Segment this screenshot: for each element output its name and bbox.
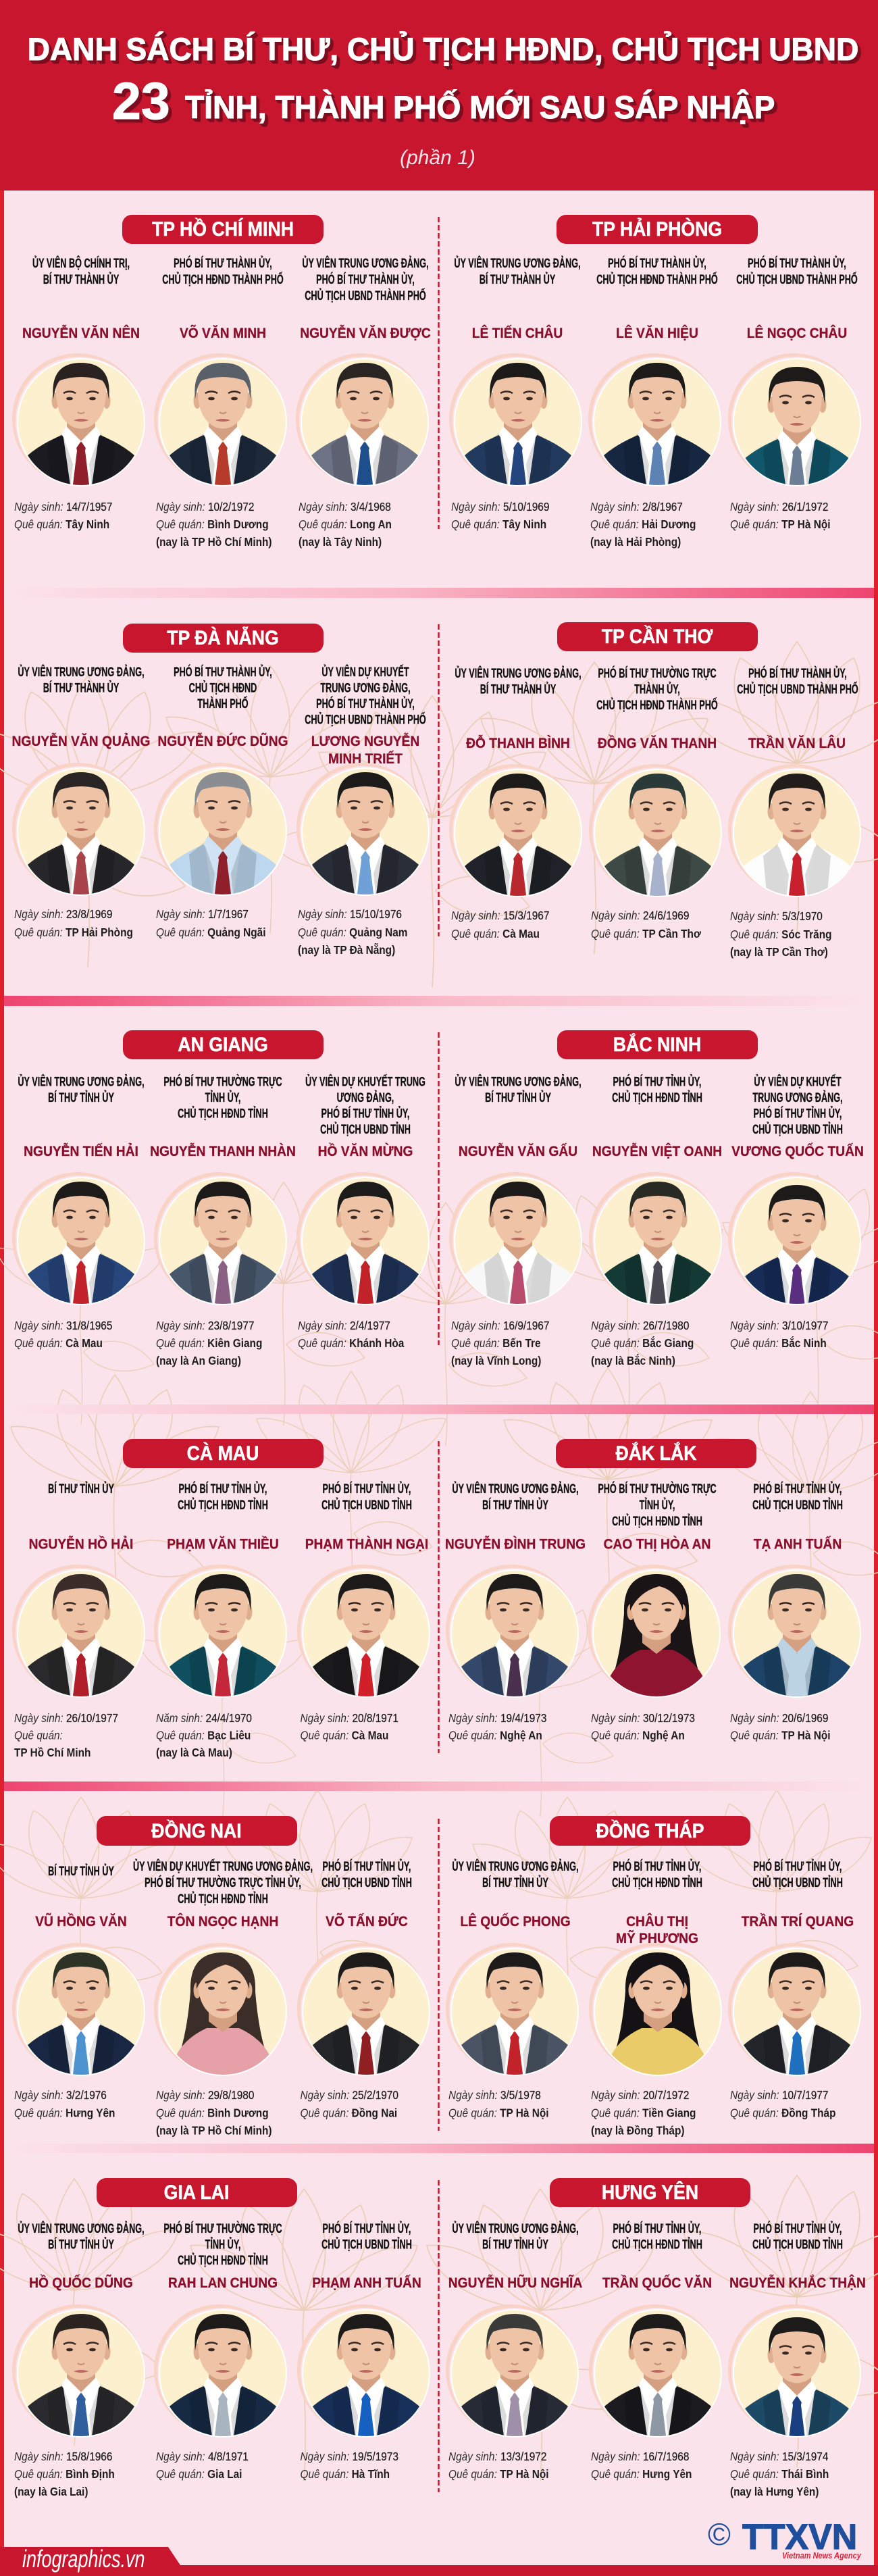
person: Lê Tiến Châu: Quê quán: Tây Ninh xyxy=(451,518,546,531)
heading: TP HẢI PHÒNG xyxy=(592,218,722,241)
person: Võ Tấn Đức xyxy=(297,1859,430,2120)
person: Nguyễn Tiến Hải: NGUYỄN TIẾN HẢI xyxy=(24,1143,138,1159)
person: Trần Văn Lâu: PHÓ BÍ THƯ THÀNH ỦY, xyxy=(748,665,847,681)
person: Nguyễn Khắc Thận: PHÓ BÍ THƯ TỈNH ỦY, xyxy=(754,2221,842,2236)
heading: TP ĐÀ NẴNG xyxy=(167,626,279,649)
person: Hồ Văn Mừng: HỒ VĂN MỪNG xyxy=(318,1142,413,1159)
heading xyxy=(550,1816,750,1846)
title: TỈNH, THÀNH PHỐ MỚI SAU SÁP NHẬP xyxy=(185,90,775,125)
person: Nguyễn Hồ Hải: NGUYỄN HỒ HẢI xyxy=(29,1535,133,1552)
person: Rah Lan Chung: RAH LAN CHUNG xyxy=(168,2275,278,2291)
person: Đỗ Thanh Bình: Quê quán: Cà Mau xyxy=(451,928,540,940)
person: Nguyễn Thanh Nhàn xyxy=(150,1074,296,1367)
person: Rah Lan Chung xyxy=(154,2221,287,2481)
person: Trần Trí Quang: TRẦN TRÍ QUANG xyxy=(742,1913,854,1929)
footer bar xyxy=(0,2545,878,2576)
person: Đồng Văn Thanh: ĐỒNG VĂN THANH xyxy=(598,734,717,751)
person: Trần Trí Quang xyxy=(728,1859,861,2120)
person: Đỗ Thanh Bình: ỦY VIÊN TRUNG ƯƠNG ĐẢNG, xyxy=(455,665,582,681)
person: Nguyễn Văn Được: NGUYỄN VĂN ĐƯỢC xyxy=(300,325,431,341)
person: Phạm Thành Ngại: Quê quán: Cà Mau xyxy=(300,1729,388,1742)
person: Nguyễn Đức Dũng: Ngày sinh: 1/7/1967 xyxy=(156,908,249,921)
person: Nguyễn Đức Dũng: Quê quán: Quảng Ngãi xyxy=(156,926,265,939)
panel: TP Cần Thơ xyxy=(449,622,861,959)
person: Nguyễn Hữu Nghĩa: Ngày sinh: 13/3/1972 xyxy=(448,2450,546,2463)
person: Nguyễn Văn Được: (nay là Tây Ninh) xyxy=(299,536,382,549)
person: Hồ Văn Mừng xyxy=(296,1074,430,1350)
person: Hồ Quốc Dũng: BÍ THƯ TỈNH ỦY xyxy=(48,2237,114,2252)
person: Nguyễn Đức Dũng xyxy=(154,664,288,939)
person: Nguyễn Văn Quảng: Quê quán: TP Hải Phòng xyxy=(14,926,133,939)
title xyxy=(28,31,858,130)
person: Nguyễn Hữu Nghĩa: Quê quán: TP Hà Nội xyxy=(448,2468,549,2481)
person: Trần Văn Lâu: (nay là TP Cần Thơ) xyxy=(730,946,828,959)
person: Vũ Hồng Văn: VŨ HỒNG VĂN xyxy=(35,1913,127,1929)
person: Phạm Anh Tuấn xyxy=(297,2221,430,2481)
person: Lê Ngọc Châu: PHÓ BÍ THƯ THÀNH ỦY, xyxy=(748,255,846,271)
person: Tôn Ngọc Hạnh: (nay là TP Hồ Chí Minh) xyxy=(156,2125,272,2138)
person: Nguyễn Văn Quảng: NGUYỄN VĂN QUẢNG xyxy=(12,733,150,749)
panel: An Giang xyxy=(12,1030,430,1367)
person: Lương Nguyễn Minh Triết: Ngày sinh: 15/10/1976 xyxy=(298,908,402,921)
person: Vương Quốc Tuấn: Ngày sinh: 3/10/1977 xyxy=(730,1319,828,1332)
person: Lương Nguyễn Minh Triết: PHÓ BÍ THƯ THÀNH ỦY, xyxy=(316,696,415,711)
heading xyxy=(97,1816,297,1846)
title: DANH SÁCH BÍ THƯ, CHỦ TỊCH HĐND, CHỦ TỊCH UBND xyxy=(28,31,858,67)
person: Đồng Văn Thanh: PHÓ BÍ THƯ THƯỜNG TRỰC xyxy=(598,665,717,681)
person: Nguyễn Việt Oanh: NGUYỄN VIỆT OANH xyxy=(592,1142,722,1159)
person: Nguyễn Hồ Hải: Quê quán: xyxy=(14,1729,63,1742)
person: Võ Văn Minh: VÕ VĂN MINH xyxy=(180,324,266,341)
person: Vương Quốc Tuấn: VƯƠNG QUỐC TUẤN xyxy=(731,1142,864,1159)
person: Nguyễn Văn Quảng: BÍ THƯ THÀNH ỦY xyxy=(43,680,119,695)
person: Đỗ Thanh Bình xyxy=(449,665,582,940)
panel: Cà Mau xyxy=(12,1439,430,1759)
heading: ĐỒNG THÁP xyxy=(596,1820,704,1842)
person: Võ Văn Minh: Quê quán: Bình Dương xyxy=(156,518,269,531)
person: Hồ Văn Mừng: ƯƠNG ĐẢNG, xyxy=(337,1090,394,1105)
person: Nguyễn Đức Dũng: CHỦ TỊCH HĐND xyxy=(189,680,257,695)
panel: Gia Lai xyxy=(12,2178,430,2498)
person: Nguyễn Việt Oanh xyxy=(589,1074,722,1367)
heading: CÀ MAU xyxy=(187,1442,259,1465)
person: Châu Thị Mỹ Phương: MỸ PHƯƠNG xyxy=(616,1930,698,1946)
person: Trần Văn Lâu: CHỦ TỊCH UBND THÀNH PHỐ xyxy=(737,681,858,697)
person: Đỗ Thanh Bình: BÍ THƯ THÀNH ỦY xyxy=(480,682,556,697)
person: Nguyễn Văn Gấu: Quê quán: Bến Tre xyxy=(451,1337,541,1350)
person: Nguyễn Đình Trung: NGUYỄN ĐÌNH TRUNG xyxy=(445,1536,586,1552)
person: Lương Nguyễn Minh Triết: ỦY VIÊN DỰ KHUYẾT xyxy=(321,664,409,680)
heading: TP HỒ CHÍ MINH xyxy=(152,218,294,241)
person: Nguyễn Thanh Nhàn: TỈNH ỦY, xyxy=(205,1090,240,1105)
heading xyxy=(556,1439,756,1468)
person: Rah Lan Chung: Quê quán: Gia Lai xyxy=(156,2468,242,2481)
person: Lê Văn Hiệu: CHỦ TỊCH HĐND THÀNH PHỐ xyxy=(596,271,718,287)
person: Nguyễn Văn Quảng: Ngày sinh: 23/8/1969 xyxy=(14,908,112,921)
person: Hồ Quốc Dũng: Ngày sinh: 15/8/1966 xyxy=(14,2450,112,2463)
heading xyxy=(550,2178,750,2207)
person: Trần Trí Quang: Ngày sinh: 10/7/1977 xyxy=(730,2089,828,2102)
heading: HƯNG YÊN xyxy=(602,2181,698,2204)
person: Cao Thị Hòa An: PHÓ BÍ THƯ THƯỜNG TRỰC xyxy=(598,1481,717,1496)
person: Trần Trí Quang: PHÓ BÍ THƯ TỈNH ỦY, xyxy=(754,1859,842,1874)
person: Tạ Anh Tuấn: TẠ ANH TUẤN xyxy=(754,1536,842,1552)
person: Nguyễn Hồ Hải: BÍ THƯ TỈNH ỦY xyxy=(48,1481,114,1496)
person: Nguyễn Văn Quảng xyxy=(12,664,150,939)
person: Hồ Văn Mừng: CHỦ TỊCH UBND TỈNH xyxy=(320,1121,411,1137)
person: Nguyễn Thanh Nhàn: Ngày sinh: 23/8/1977 xyxy=(156,1319,254,1332)
person: Nguyễn Khắc Thận: Quê quán: Thái Bình xyxy=(730,2468,829,2481)
person: Nguyễn Văn Nên: BÍ THƯ THÀNH ỦY xyxy=(43,272,119,287)
person: Nguyễn Tiến Hải: Ngày sinh: 31/8/1965 xyxy=(14,1319,112,1332)
person: Lê Quốc Phong: ỦY VIÊN TRUNG ƯƠNG ĐẢNG, xyxy=(452,1859,579,1874)
person: Nguyễn Văn Nên: NGUYỄN VĂN NÊN xyxy=(22,324,140,341)
person: Nguyễn Thanh Nhàn: (nay là An Giang) xyxy=(156,1355,241,1367)
panel: Đồng Nai xyxy=(12,1816,430,2138)
heading xyxy=(123,1439,324,1468)
person: Đỗ Thanh Bình: Ngày sinh: 15/3/1967 xyxy=(451,909,549,922)
person: Hồ Văn Mừng: PHÓ BÍ THƯ TỈNH ỦY, xyxy=(321,1106,409,1121)
person: Hồ Quốc Dũng: Quê quán: Bình Định xyxy=(14,2468,115,2481)
person: Nguyễn Khắc Thận: Ngày sinh: 15/3/1974 xyxy=(730,2450,828,2463)
person: Phạm Văn Thiều: CHỦ TỊCH HĐND TỈNH xyxy=(178,1497,268,1513)
person: Đồng Văn Thanh: Quê quán: TP Cần Thơ xyxy=(591,928,701,940)
person: Rah Lan Chung: PHÓ BÍ THƯ THƯỜNG TRỰC xyxy=(163,2221,282,2236)
person: Lê Quốc Phong: Quê quán: TP Hà Nội xyxy=(448,2107,549,2120)
person: Nguyễn Văn Gấu: BÍ THƯ TỈNH ỦY xyxy=(485,1090,551,1105)
logo: TTXVN xyxy=(708,2517,862,2560)
person: Phạm Anh Tuấn: PHẠM ANH TUẤN xyxy=(312,2275,421,2291)
person: Hồ Văn Mừng: ỦY VIÊN DỰ KHUYẾT TRUNG xyxy=(305,1074,425,1089)
person: Lương Nguyễn Minh Triết: Quê quán: Quảng Nam xyxy=(298,926,407,939)
person: Tạ Anh Tuấn xyxy=(728,1481,861,1742)
person: Nguyễn Hồ Hải: Ngày sinh: 26/10/1977 xyxy=(14,1712,118,1725)
person: Lương Nguyễn Minh Triết xyxy=(296,664,430,957)
person: Châu Thị Mỹ Phương xyxy=(589,1859,722,2138)
person: Võ Tấn Đức: Ngày sinh: 25/2/1970 xyxy=(300,2089,398,2102)
person: Trần Văn Lâu: Ngày sinh: 5/3/1970 xyxy=(730,910,823,923)
heading xyxy=(557,1030,758,1059)
person: Nguyễn Văn Được: ỦY VIÊN TRUNG ƯƠNG ĐẢNG, xyxy=(302,255,429,271)
person: Võ Tấn Đức: Quê quán: Đồng Nai xyxy=(300,2107,397,2120)
heading xyxy=(122,215,324,244)
person: Trần Văn Lâu: TRẦN VĂN LÂU xyxy=(748,734,846,751)
person: Vương Quốc Tuấn: CHỦ TỊCH UBND TỈNH xyxy=(752,1121,843,1137)
panel: TP Hải Phòng xyxy=(449,215,861,549)
person: Đồng Văn Thanh xyxy=(589,665,722,940)
logo: TTXVN: © xyxy=(708,2517,731,2552)
panel: Đắk Lắk xyxy=(445,1439,861,1742)
subtitle: (phần 1) xyxy=(400,147,475,169)
panel: Bắc Ninh xyxy=(449,1030,864,1367)
person: Nguyễn Thanh Nhàn: NGUYỄN THANH NHÀN xyxy=(150,1143,296,1159)
person: Lê Văn Hiệu: LÊ VĂN HIỆU xyxy=(616,324,698,341)
person: Nguyễn Văn Được: PHÓ BÍ THƯ THÀNH ỦY, xyxy=(316,272,415,287)
heading: ĐỒNG NAI xyxy=(151,1820,242,1842)
person: Đỗ Thanh Bình: ĐỖ THANH BÌNH xyxy=(466,734,570,751)
person: Nguyễn Khắc Thận: CHỦ TỊCH UBND TỈNH xyxy=(752,2237,843,2252)
person: Trần Trí Quang: CHỦ TỊCH UBND TỈNH xyxy=(752,1875,843,1890)
person: Tạ Anh Tuấn: Quê quán: TP Hà Nội xyxy=(730,1729,831,1742)
person: Lê Ngọc Châu: LÊ NGỌC CHÂU xyxy=(747,324,847,341)
person: Nguyễn Hồ Hải xyxy=(12,1481,145,1759)
person: Võ Tấn Đức: PHÓ BÍ THƯ TỈNH ỦY, xyxy=(323,1859,411,1874)
person: Vương Quốc Tuấn xyxy=(728,1074,864,1350)
heading xyxy=(123,624,324,653)
person: Cao Thị Hòa An: CAO THỊ HÒA AN xyxy=(604,1535,711,1552)
person: Phạm Văn Thiều: (nay là Cà Mau) xyxy=(156,1746,232,1759)
person: Cao Thị Hòa An xyxy=(588,1481,721,1742)
person: Nguyễn Đình Trung: Quê quán: Nghệ An xyxy=(448,1729,542,1742)
person: Nguyễn Đình Trung: Ngày sinh: 19/4/1973 xyxy=(448,1712,546,1725)
person: Nguyễn Khắc Thận: NGUYỄN KHẮC THẬN xyxy=(729,2274,866,2291)
person: Nguyễn Thanh Nhàn: CHỦ TỊCH HĐND TỈNH xyxy=(178,1106,268,1121)
heading xyxy=(557,215,758,244)
panel: Đồng Tháp xyxy=(446,1816,861,2138)
person: Nguyễn Văn Gấu: (nay là Vĩnh Long) xyxy=(451,1355,541,1367)
person: Nguyễn Khắc Thận xyxy=(728,2221,866,2498)
person: Châu Thị Mỹ Phương: Ngày sinh: 20/7/1972 xyxy=(591,2089,689,2102)
person: Nguyễn Tiến Hải xyxy=(12,1074,145,1350)
person: Đồng Văn Thanh: THÀNH ỦY, xyxy=(634,682,680,697)
logo: TTXVN: Vietnam News Agency xyxy=(782,2550,862,2560)
person: Lương Nguyễn Minh Triết: TRUNG ƯƠNG ĐẢNG, xyxy=(320,680,411,695)
heading xyxy=(557,622,758,651)
person: Trần Quốc Văn xyxy=(589,2221,722,2481)
person: Hồ Quốc Dũng: (nay là Gia Lai) xyxy=(14,2485,88,2498)
person: Nguyễn Văn Gấu: ỦY VIÊN TRUNG ƯƠNG ĐẢNG, xyxy=(455,1074,582,1089)
person: Hồ Quốc Dũng: HỒ QUỐC DŨNG xyxy=(29,2274,133,2291)
person: Nguyễn Văn Quảng: ỦY VIÊN TRUNG ƯƠNG ĐẢNG, xyxy=(18,664,145,680)
person: Lê Ngọc Châu: Ngày sinh: 26/1/1972 xyxy=(730,501,828,513)
person: Võ Văn Minh: (nay là TP Hồ Chí Minh) xyxy=(156,536,272,549)
person: Nguyễn Đình Trung xyxy=(445,1481,586,1742)
person: Phạm Văn Thiều xyxy=(154,1481,287,1759)
person: Nguyễn Văn Được xyxy=(296,255,431,549)
person: Lê Quốc Phong: BÍ THƯ TỈNH ỦY xyxy=(482,1875,548,1890)
person: Nguyễn Đình Trung: ỦY VIÊN TRUNG ƯƠNG ĐẢNG, xyxy=(452,1481,579,1496)
person: Phạm Văn Thiều: Quê quán: Bạc Liêu xyxy=(156,1729,251,1742)
person: Nguyễn Văn Gấu: Ngày sinh: 16/9/1967 xyxy=(451,1319,549,1332)
person: Võ Văn Minh xyxy=(154,255,287,549)
person: Cao Thị Hòa An: TỈNH ỦY, xyxy=(640,1497,675,1513)
person: Lê Ngọc Châu: Quê quán: TP Hà Nội xyxy=(730,518,831,531)
person: Vũ Hồng Văn: BÍ THƯ TỈNH ỦY xyxy=(48,1863,114,1879)
footer bar: infographics.vn xyxy=(22,2545,145,2573)
person: Võ Tấn Đức: CHỦ TỊCH UBND TỈNH xyxy=(321,1875,412,1890)
person: Tôn Ngọc Hạnh: ỦY VIÊN DỰ KHUYẾT TRUNG ƯƠNG ĐẢNG, xyxy=(133,1859,313,1874)
person: Vương Quốc Tuấn: TRUNG ƯƠNG ĐẢNG, xyxy=(752,1090,843,1105)
person: Phạm Thành Ngại: Ngày sinh: 20/8/1971 xyxy=(300,1712,398,1725)
person: Phạm Anh Tuấn: PHÓ BÍ THƯ TỈNH ỦY, xyxy=(323,2221,411,2236)
person: Châu Thị Mỹ Phương: PHÓ BÍ THƯ TỈNH ỦY, xyxy=(613,1859,701,1874)
person: Nguyễn Việt Oanh: (nay là Bắc Ninh) xyxy=(591,1354,675,1367)
person: Lương Nguyễn Minh Triết: (nay là TP Đà Nẵng) xyxy=(298,942,395,957)
person: Nguyễn Văn Gấu xyxy=(449,1074,582,1367)
panel: Hưng Yên xyxy=(446,2178,866,2498)
person: Nguyễn Văn Nên: ỦY VIÊN BỘ CHÍNH TRỊ, xyxy=(32,255,130,271)
person: Rah Lan Chung: TỈNH ỦY, xyxy=(205,2237,240,2252)
person: Lê Văn Hiệu: PHÓ BÍ THƯ THÀNH ỦY, xyxy=(608,255,706,271)
person: Phạm Thành Ngại xyxy=(297,1481,430,1742)
person: Nguyễn Đức Dũng: PHÓ BÍ THƯ THÀNH ỦY, xyxy=(174,664,272,680)
person: Phạm Văn Thiều: PHÓ BÍ THƯ TỈNH ỦY, xyxy=(179,1481,267,1496)
person: Lê Tiến Châu: Ngày sinh: 5/10/1969 xyxy=(451,501,549,513)
person: Võ Văn Minh: Ngày sinh: 10/2/1972 xyxy=(156,501,254,513)
person: Nguyễn Đình Trung: BÍ THƯ TỈNH ỦY xyxy=(482,1497,548,1513)
person: Phạm Thành Ngại: CHỦ TỊCH UBND TỈNH xyxy=(321,1497,412,1513)
person: Hồ Văn Mừng: Quê quán: Khánh Hòa xyxy=(298,1337,404,1350)
person: Lương Nguyễn Minh Triết: CHỦ TỊCH UBND THÀNH PHỐ xyxy=(305,711,426,727)
person: Hồ Quốc Dũng: ỦY VIÊN TRUNG ƯƠNG ĐẢNG, xyxy=(18,2221,145,2236)
person: Nguyễn Hữu Nghĩa: BÍ THƯ TỈNH ỦY xyxy=(482,2237,548,2252)
heading xyxy=(123,1030,324,1059)
person: Trần Quốc Văn: Quê quán: Hưng Yên xyxy=(591,2468,692,2481)
logo: TTXVN: TTXVN xyxy=(742,2518,857,2557)
person: Tạ Anh Tuấn: Ngày sinh: 20/6/1969 xyxy=(730,1712,828,1725)
person: Nguyễn Tiến Hải: Quê quán: Cà Mau xyxy=(14,1337,103,1350)
person: Tôn Ngọc Hạnh: Quê quán: Bình Dương xyxy=(156,2107,269,2120)
person: Trần Trí Quang: Quê quán: Đồng Tháp xyxy=(730,2107,835,2120)
heading xyxy=(97,2178,297,2207)
person: Lê Văn Hiệu: Ngày sinh: 2/8/1967 xyxy=(590,501,683,513)
person: Lê Quốc Phong: LÊ QUỐC PHONG xyxy=(460,1913,571,1929)
person: Vương Quốc Tuấn: ỦY VIÊN DỰ KHUYẾT xyxy=(754,1074,842,1089)
person: Võ Văn Minh: CHỦ TỊCH HĐND THÀNH PHỐ xyxy=(162,271,284,287)
person: Vũ Hồng Văn: Ngày sinh: 3/2/1976 xyxy=(14,2089,107,2102)
person: Châu Thị Mỹ Phương: CHÂU THỊ xyxy=(626,1913,688,1929)
person: Vũ Hồng Văn xyxy=(12,1863,145,2120)
person: Cao Thị Hòa An: Quê quán: Nghệ An xyxy=(591,1729,685,1742)
person: Trần Văn Lâu: Quê quán: Sóc Trăng xyxy=(730,928,832,941)
person: Lương Nguyễn Minh Triết: LƯƠNG NGUYỄN xyxy=(311,733,419,749)
person: Nguyễn Văn Nên: Ngày sinh: 14/7/1957 xyxy=(14,501,112,513)
person: Nguyễn Thanh Nhàn: PHÓ BÍ THƯ THƯỜNG TRỰC xyxy=(163,1074,282,1089)
person: Trần Quốc Văn: Ngày sinh: 16/7/1968 xyxy=(591,2450,689,2463)
person: Tạ Anh Tuấn: PHÓ BÍ THƯ TỈNH ỦY, xyxy=(754,1481,842,1496)
person: Võ Văn Minh: PHÓ BÍ THƯ THÀNH ỦY, xyxy=(174,255,272,271)
person: Nguyễn Đức Dũng: THÀNH PHỐ xyxy=(197,695,249,711)
person: Trần Văn Lâu xyxy=(728,665,861,959)
heading: AN GIANG xyxy=(178,1034,268,1056)
person: Nguyễn Việt Oanh: Ngày sinh: 26/7/1980 xyxy=(591,1319,689,1332)
person: Nguyễn Hồ Hải: TP Hồ Chí Minh xyxy=(14,1746,91,1759)
heading: TP CẦN THƠ xyxy=(602,626,713,648)
person: Lê Ngọc Châu xyxy=(728,255,861,531)
person: Cao Thị Hòa An: Ngày sinh: 30/12/1973 xyxy=(591,1712,695,1725)
person: Phạm Anh Tuấn: Quê quán: Hà Tĩnh xyxy=(300,2468,390,2481)
person: Trần Quốc Văn: CHỦ TỊCH HĐND TỈNH xyxy=(612,2237,702,2252)
person: Lê Văn Hiệu: Quê quán: Hải Dương xyxy=(590,518,696,531)
person: Phạm Anh Tuấn: Ngày sinh: 19/5/1973 xyxy=(300,2450,398,2463)
person: Cao Thị Hòa An: CHỦ TỊCH HĐND TỈNH xyxy=(612,1513,702,1529)
person: Lê Quốc Phong xyxy=(446,1859,579,2120)
person: Nguyễn Việt Oanh: Quê quán: Bắc Giang xyxy=(591,1337,694,1350)
person: Lê Quốc Phong: Ngày sinh: 3/5/1978 xyxy=(448,2089,541,2102)
person: Tôn Ngọc Hạnh: CHỦ TỊCH HĐND TỈNH xyxy=(178,1891,268,1906)
person: Nguyễn Văn Gấu: NGUYỄN VĂN GẤU xyxy=(459,1143,577,1159)
person: Châu Thị Mỹ Phương: Quê quán: Tiền Giang xyxy=(591,2107,696,2120)
person: Nguyễn Tiến Hải: BÍ THƯ TỈNH ỦY xyxy=(48,1090,114,1105)
person: Phạm Văn Thiều: PHẠM VĂN THIỀU xyxy=(167,1536,279,1552)
person: Tôn Ngọc Hạnh: Ngày sinh: 29/8/1980 xyxy=(156,2089,254,2102)
person: Vương Quốc Tuấn: PHÓ BÍ THƯ TỈNH ỦY, xyxy=(754,1106,842,1121)
person: Phạm Anh Tuấn: CHỦ TỊCH UBND TỈNH xyxy=(321,2237,412,2252)
person: Lê Văn Hiệu xyxy=(588,255,721,549)
panel: TP Đà Nẵng xyxy=(12,624,430,957)
person: Trần Quốc Văn: PHÓ BÍ THƯ TỈNH ỦY, xyxy=(613,2221,701,2236)
person: Tôn Ngọc Hạnh xyxy=(133,1859,313,2138)
person: Đồng Văn Thanh: CHỦ TỊCH HĐND THÀNH PHỐ xyxy=(596,697,718,713)
panel: TP Hồ Chí Minh xyxy=(12,215,431,549)
person: Phạm Thành Ngại: PHẠM THÀNH NGẠI xyxy=(305,1536,428,1552)
person: Nguyễn Thanh Nhàn: Quê quán: Kiên Giang xyxy=(156,1337,262,1350)
person: Nguyễn Tiến Hải: ỦY VIÊN TRUNG ƯƠNG ĐẢNG, xyxy=(18,1074,145,1089)
person: Nguyễn Văn Nên xyxy=(12,255,145,531)
person: Rah Lan Chung: Ngày sinh: 4/8/1971 xyxy=(156,2450,249,2463)
person: Phạm Thành Ngại: PHÓ BÍ THƯ TỈNH ỦY, xyxy=(323,1481,411,1496)
person: Lê Tiến Châu xyxy=(449,255,582,531)
person: Tôn Ngọc Hạnh: PHÓ BÍ THƯ THƯỜNG TRỰC TỈNH ỦY, xyxy=(145,1875,301,1890)
person: Nguyễn Văn Nên: Quê quán: Tây Ninh xyxy=(14,518,109,531)
person: Lê Tiến Châu: BÍ THƯ THÀNH ỦY xyxy=(480,272,555,287)
person: Lê Tiến Châu: LÊ TIẾN CHÂU xyxy=(472,324,563,341)
person: Rah Lan Chung: CHỦ TỊCH HĐND TỈNH xyxy=(178,2252,268,2268)
person: Châu Thị Mỹ Phương: (nay là Đồng Tháp) xyxy=(591,2125,684,2138)
person: Trần Quốc Văn: TRẦN QUỐC VĂN xyxy=(602,2274,712,2291)
person: Lương Nguyễn Minh Triết: MINH TRIẾT xyxy=(328,751,403,767)
person: Võ Tấn Đức: VÕ TẤN ĐỨC xyxy=(326,1913,408,1929)
person: Hồ Quốc Dũng xyxy=(12,2221,145,2498)
person: Nguyễn Hữu Nghĩa: ỦY VIÊN TRUNG ƯƠNG ĐẢNG, xyxy=(452,2221,579,2236)
heading: GIA LAI xyxy=(164,2181,229,2204)
person: Nguyễn Việt Oanh: PHÓ BÍ THƯ TỈNH ỦY, xyxy=(613,1074,701,1089)
heading: ĐẮK LẮK xyxy=(615,1442,697,1465)
person: Nguyễn Hữu Nghĩa xyxy=(446,2221,582,2481)
person: Nguyễn Văn Được: CHỦ TỊCH UBND THÀNH PHỐ xyxy=(305,287,426,303)
person: Lê Tiến Châu: ỦY VIÊN TRUNG ƯƠNG ĐẢNG, xyxy=(454,255,581,271)
person: Lê Ngọc Châu: CHỦ TỊCH UBND THÀNH PHỐ xyxy=(736,271,858,287)
person: Nguyễn Đức Dũng: NGUYỄN ĐỨC DŨNG xyxy=(157,732,288,749)
person: Hồ Văn Mừng: Ngày sinh: 2/4/1977 xyxy=(298,1319,390,1332)
person: Tạ Anh Tuấn: CHỦ TỊCH UBND TỈNH xyxy=(752,1497,843,1513)
person: Nguyễn Việt Oanh: CHỦ TỊCH HĐND TỈNH xyxy=(612,1090,702,1105)
person: Nguyễn Khắc Thận: (nay là Hưng Yên) xyxy=(730,2485,819,2498)
person: Phạm Văn Thiều: Năm sinh: 24/4/1970 xyxy=(156,1712,252,1725)
person: Vũ Hồng Văn: Quê quán: Hưng Yên xyxy=(14,2107,115,2120)
person: Nguyễn Hữu Nghĩa: NGUYỄN HỮU NGHĨA xyxy=(448,2274,582,2291)
person: Đồng Văn Thanh: Ngày sinh: 24/6/1969 xyxy=(591,909,689,922)
person: Lê Văn Hiệu: (nay là Hải Phòng) xyxy=(590,536,681,549)
title: 23 xyxy=(112,72,170,130)
person: Châu Thị Mỹ Phương: CHỦ TỊCH HĐND TỈNH xyxy=(612,1875,702,1890)
heading: BẮC NINH xyxy=(613,1034,701,1056)
person: Tôn Ngọc Hạnh: TÔN NGỌC HẠNH xyxy=(167,1913,278,1929)
person: Nguyễn Văn Được: Ngày sinh: 3/4/1968 xyxy=(299,501,391,513)
person: Vương Quốc Tuấn: Quê quán: Bắc Ninh xyxy=(730,1337,827,1350)
person: Nguyễn Văn Được: Quê quán: Long An xyxy=(299,518,392,531)
